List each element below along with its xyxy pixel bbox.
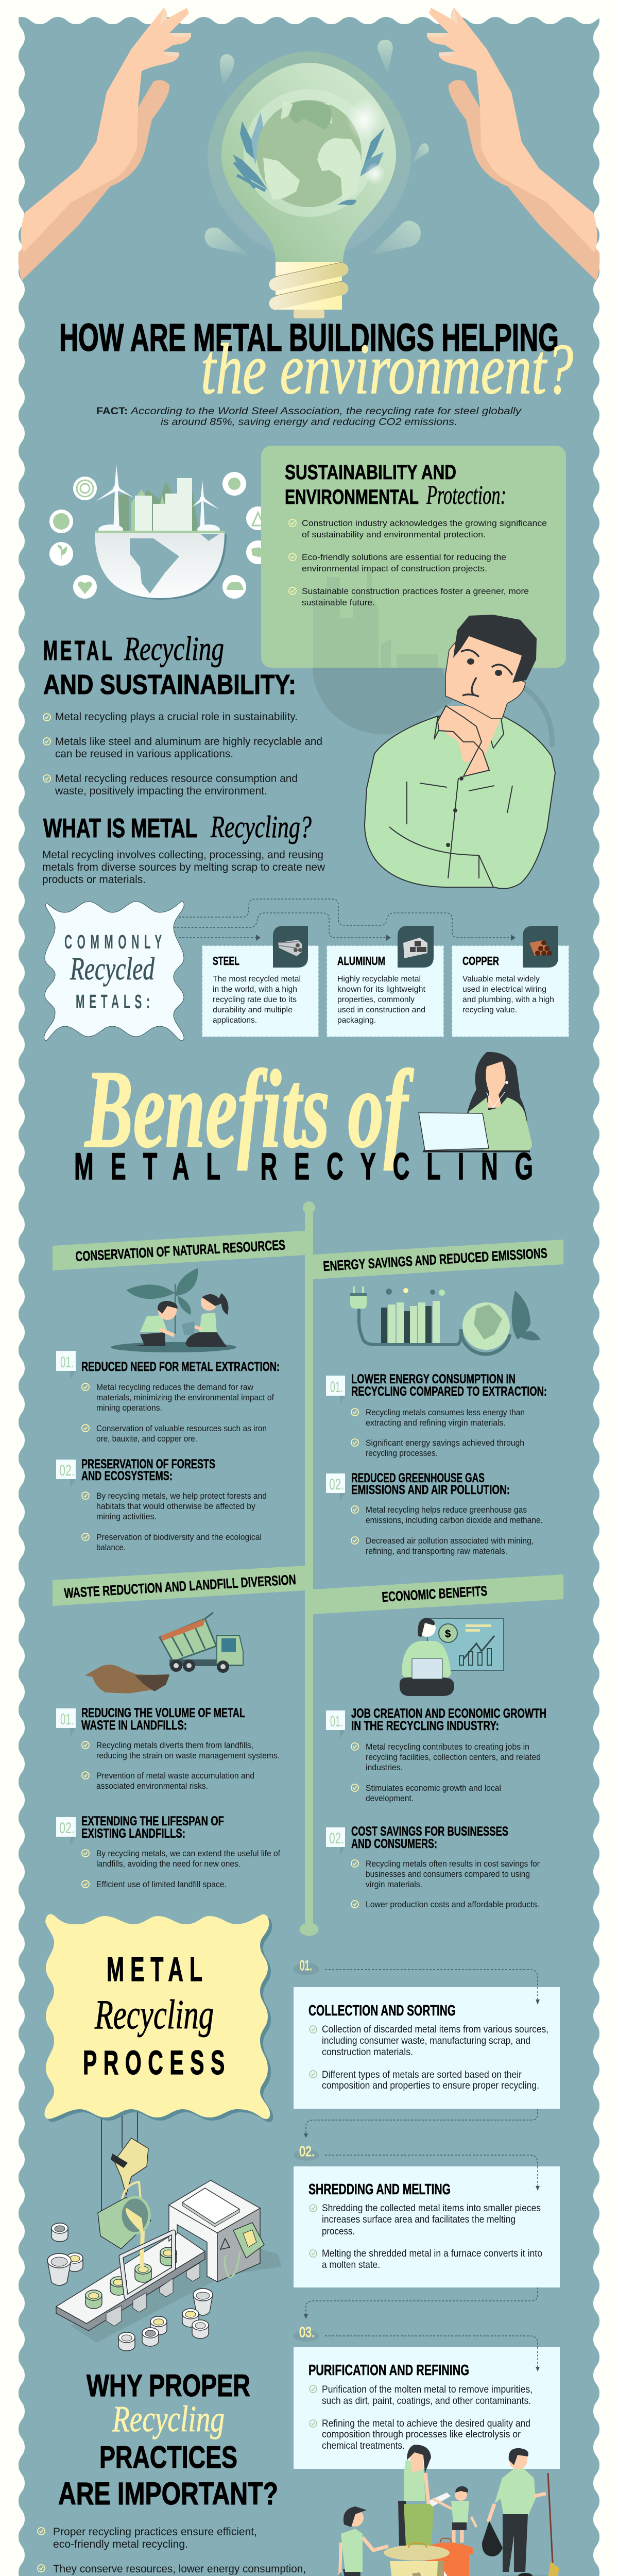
heading: preservation of forests: PRESERVATION OF FORESTS	[81, 1457, 215, 1471]
heading: job creation: JOB CREATION AND ECONOMIC GROWTH	[351, 1706, 546, 1721]
heading: metal recycling: METAL RECYCLING	[74, 1145, 533, 1188]
card: steel	[203, 926, 317, 1036]
fact text: According to the World Steel Association, the recycling rate for steel globally	[130, 406, 522, 417]
step 01 number and connector	[294, 1957, 540, 2005]
card: shredding and melting: process.	[322, 2226, 355, 2237]
card: copper: used in electrical wiring	[462, 985, 546, 994]
arrow: card 1 to step 02	[304, 2109, 538, 2138]
card: aluminum: ALUMINUM	[337, 954, 385, 968]
heading: extending the lifespan	[81, 1814, 224, 1841]
bullet list: why recycling is important	[38, 2526, 308, 2576]
heading: why proper recycling practices are important: WHY PROPER	[87, 2368, 250, 2403]
panel: metal recycling process blob: METAL	[107, 1950, 202, 1988]
tag 01: 01.	[330, 1713, 343, 1730]
card: aluminum: used in construction and	[337, 1006, 425, 1014]
panel: commonly recycled metals: METALS:	[76, 991, 150, 1013]
bullet list: sustainability: Sustainable construction practices foster a greener, more	[302, 586, 529, 596]
bullet list: reducing volume: associated environmental risks.	[96, 1781, 208, 1791]
card: purification and refining: composition through processes like electrolysis or	[322, 2429, 521, 2440]
card: aluminum: known for its lightweight	[337, 985, 426, 994]
card: shredding and melting	[294, 2166, 560, 2287]
card: copper: and plumbing, with a high	[462, 995, 554, 1004]
bullet list: why recycling is important: Proper recycling practices ensure efficient,	[53, 2526, 257, 2538]
bullet list: cost savings	[351, 1859, 540, 1909]
bullet list: extending lifespan: landfills, avoiding the need for new ones.	[96, 1859, 241, 1869]
bullet list: cost savings: businesses and consumers compared to using	[366, 1869, 530, 1879]
ribbon: waste reduction and landfill diversion	[53, 1566, 305, 1606]
paragraph: what is metal recycling: products or materials.	[42, 874, 146, 886]
fact text: FACT:	[96, 406, 128, 417]
bullet list: reduced need: materials, minimizing the environmental impact of	[96, 1393, 274, 1402]
tag 02: 02.	[59, 1820, 75, 1837]
card: shredding and melting: increases surface area and facilitates the melting	[322, 2214, 516, 2225]
heading: why proper recycling practices are important: PRACTICES	[99, 2440, 237, 2475]
icon: right hand	[427, 8, 599, 281]
tag 01	[326, 1376, 345, 1404]
bullet list: why recycling is important: They conserve resources, lower energy consumption,	[53, 2563, 306, 2575]
heading: sustainability and: SUSTAINABILITY AND	[285, 461, 456, 484]
bullet list: greenhouse gas: Metal recycling helps reduce greenhouse gas	[366, 1505, 527, 1515]
bullet list: preservation: Preservation of biodiversity and the ecological	[96, 1532, 262, 1542]
bullet list: job creation: Metal recycling contributes to creating jobs in	[366, 1742, 529, 1752]
heading: extending the lifespan: EXISTING LANDFILLS:	[81, 1826, 185, 1841]
tag 01	[56, 1351, 76, 1380]
ribbon: conservation of natural resources: CONSERVATION OF NATURAL RESOURCES	[75, 1237, 286, 1264]
card: purification and refining: PURIFICATION AND REFINING	[308, 2362, 469, 2379]
ribbon: conservation of natural resources	[53, 1230, 313, 1270]
tag 02	[56, 1460, 76, 1488]
card: collection and sorting	[294, 1987, 560, 2109]
paragraph: what is metal recycling: metals from diverse sources by melting scrap to create new	[42, 861, 325, 873]
tag 02	[56, 1817, 76, 1845]
bullet list: metal recycling: Metal recycling reduces resource consumption and	[55, 773, 298, 785]
heading: what is metal recycling	[43, 810, 312, 844]
card: copper	[453, 926, 568, 1036]
card: collection and sorting: Different types of metals are sorted based on their	[322, 2070, 522, 2080]
bullet list: extending lifespan: By recycling metals, we can extend the useful life of	[96, 1849, 280, 1858]
heading: why proper recycling practices are important: ARE IMPORTANT?	[58, 2476, 278, 2511]
bullet list: lower energy: Recycling metals consumes less energy than	[366, 1408, 525, 1417]
card: aluminum	[328, 926, 442, 1036]
icon: woman with laptop	[419, 1052, 532, 1152]
bullet list: extending lifespan	[82, 1849, 280, 1889]
panel: commonly recycled metals: Recycled	[70, 952, 155, 987]
bullet list: cost savings: virgin materials.	[366, 1879, 422, 1889]
tag 01	[326, 1710, 345, 1739]
heading: why proper recycling practices are important: Recycling	[112, 2398, 225, 2439]
heading: lower energy consumption: RECYCLING COMPARED TO EXTRACTION:	[351, 1384, 547, 1399]
tag 01: 01.	[60, 1354, 74, 1371]
card: collection and sorting: Collection of discarded metal items from various sources,	[322, 2024, 548, 2035]
bullet list: metal recycling: Metals like steel and aluminum are highly recyclable and	[55, 736, 322, 748]
bullet list: sustainability	[289, 518, 547, 607]
paragraph: what is metal recycling	[42, 849, 325, 886]
heading: reducing the volume	[81, 1706, 245, 1733]
card: aluminum: properties, commonly	[337, 995, 415, 1004]
bullet list: preservation: By recycling metals, we help protect forests and	[96, 1491, 267, 1501]
heading: metal recycling: Recycling	[124, 630, 224, 668]
panel: metal recycling process blob: PROCESS	[83, 2043, 225, 2081]
bullet list: cost savings: Recycling metals often results in cost savings for	[366, 1859, 540, 1869]
card: purification and refining	[294, 2347, 560, 2469]
bullet list: job creation: Stimulates economic growth and local	[366, 1783, 501, 1793]
bullet list: job creation	[351, 1742, 541, 1803]
paragraph: what is metal recycling: Metal recycling involves collecting, processing, and reusing	[42, 849, 323, 861]
card: shredding and melting: a molten state.	[322, 2260, 380, 2270]
heading: reducing the volume: REDUCING THE VOLUME OF METAL	[81, 1706, 245, 1720]
heading: lower energy consumption: LOWER ENERGY CONSUMPTION IN	[351, 1372, 516, 1386]
card: steel: in the world, with a high	[213, 985, 297, 994]
bullet list: cost savings: Lower production costs and affordable products.	[366, 1900, 539, 1909]
heading: metal recycling: METAL	[43, 635, 112, 666]
icon: person with laptop and chart	[400, 1618, 504, 1696]
card: aluminum: Highly recyclable metal	[337, 975, 421, 984]
step 02 number and connector: 02.	[299, 2143, 315, 2159]
heading: what is metal recycling: Recycling?	[210, 810, 312, 844]
tag 02: 02.	[59, 1462, 75, 1479]
bullet list: sustainability: Eco-friendly solutions are essential for reducing the	[302, 552, 506, 562]
heading: environmental: ENVIRONMENTAL	[285, 486, 419, 509]
tag 02: 02.	[329, 1830, 344, 1847]
heading: preservation of forests: AND ECOSYSTEMS:	[81, 1469, 173, 1483]
arrow: card 2 to step 03	[304, 2287, 538, 2319]
step 03 number and connector: 03.	[299, 2324, 315, 2340]
heading: job creation	[351, 1706, 546, 1733]
card: shredding and melting: SHREDDING AND MELTING	[308, 2181, 451, 2198]
bullet list: sustainability: Construction industry acknowledges the growing significance	[302, 518, 547, 528]
tag 01: 01.	[60, 1711, 74, 1728]
tag 01	[56, 1708, 76, 1737]
bullet list: preservation: mining activities.	[96, 1512, 157, 1521]
icon: green energy city	[350, 1286, 541, 1354]
card: purification and refining: chemical treatments.	[322, 2441, 405, 2451]
card: steel: recycling rate due to its	[213, 995, 297, 1004]
heading: metal recycling	[43, 630, 224, 668]
bullet list: reduced need: mining operations.	[96, 1403, 162, 1413]
card: collection and sorting: composition and properties to ensure proper recycling.	[322, 2080, 539, 2091]
tag 02	[326, 1473, 345, 1502]
heading: preservation of forests	[81, 1457, 215, 1483]
bullet list: lower energy	[351, 1408, 525, 1458]
icon: half globe with green city and eco badges	[49, 465, 270, 600]
card: purification and refining: Purification of the molten metal to remove impurities,	[322, 2384, 533, 2395]
bullet list: sustainability: of sustainability and environmental protection.	[302, 530, 486, 539]
bullet list: greenhouse gas: emissions, including carbon dioxide and methane.	[366, 1515, 543, 1525]
icon: family recycling	[329, 2445, 570, 2576]
card: collection and sorting: construction materials.	[322, 2047, 413, 2058]
icon: aluminum tubes	[403, 938, 427, 958]
card: shredding and melting: Melting the shredded metal in a furnace converts it into	[322, 2248, 542, 2259]
bullet list: reduced need: Conservation of valuable resources such as iron	[96, 1423, 267, 1433]
bullet list: job creation: development.	[366, 1793, 414, 1803]
bullet list: reducing volume: reducing the strain on waste management systems.	[96, 1751, 280, 1760]
icon: copper pipes	[529, 940, 552, 956]
ribbon: energy savings and reduced emissions	[313, 1240, 563, 1279]
heading: what is metal recycling: WHAT IS METAL	[43, 814, 197, 843]
heading: extending the lifespan: EXTENDING THE LIFESPAN OF	[81, 1814, 224, 1828]
heading: cost savings: AND CONSUMERS:	[351, 1837, 437, 1851]
bullet list: reducing volume: Recycling metals diverts them from landfills,	[96, 1740, 253, 1750]
bullet list: lower energy: Significant energy savings achieved through	[366, 1438, 524, 1448]
fact text: is around 85%, saving energy and reducing CO2 emissions.	[161, 417, 457, 428]
heading: why proper recycling practices are important	[58, 2368, 278, 2511]
card: collection and sorting: COLLECTION AND SORTING	[308, 2003, 456, 2019]
card: purification and refining: Refining the metal to achieve the desired quality and	[322, 2418, 530, 2429]
bullet list: metal recycling	[43, 711, 322, 797]
card: aluminum: packaging.	[337, 1016, 376, 1025]
card: steel: durability and multiple	[213, 1006, 293, 1014]
icon: steel pipes	[278, 940, 302, 956]
bullet list: sustainability: environmental impact of construction projects.	[302, 564, 487, 573]
arrows: dashed connectors to metal cards	[174, 899, 513, 938]
icon: light drops around bulb	[205, 40, 429, 255]
bullet list: reduced need	[82, 1382, 274, 1444]
bullet list: job creation: industries.	[366, 1762, 403, 1772]
card: steel: The most recycled metal	[213, 975, 301, 984]
fact text	[96, 406, 522, 428]
step 03 number and connector	[294, 2324, 538, 2347]
icon: planting people	[111, 1268, 236, 1352]
icon: left hand	[19, 8, 191, 281]
bullet list: reduced need: ore, bauxite, and copper ore.	[96, 1434, 197, 1444]
card: shredding and melting: Shredding the collected metal items into smaller pieces	[322, 2203, 541, 2214]
bullet list: metal recycling: can be reused in various applications.	[55, 748, 233, 760]
bullet list: sustainability: sustainable future.	[302, 598, 375, 607]
bullet list: job creation: recycling facilities, collection centers, and related	[366, 1752, 541, 1762]
heading: lower energy consumption	[351, 1372, 547, 1399]
tag 02	[326, 1827, 345, 1856]
bullet list: metal recycling: waste, positively impacting the environment.	[55, 785, 267, 797]
heading: reduced greenhouse gas	[351, 1471, 510, 1497]
heading: reducing the volume: WASTE IN LANDFILLS:	[81, 1718, 187, 1733]
bullet list: preservation: balance.	[96, 1543, 126, 1552]
heading: cost savings	[351, 1824, 508, 1851]
card: copper: COPPER	[462, 954, 499, 968]
bullet list: reducing volume: Prevention of metal waste accumulation and	[96, 1771, 254, 1781]
panel: metal recycling process blob	[44, 1914, 273, 2122]
heading: reduced need for metal extraction: REDUCED NEED FOR METAL EXTRACTION:	[81, 1360, 280, 1374]
bullet list: why recycling is important: eco-friendly metal recycling.	[53, 2538, 188, 2550]
card: purification and refining: such as dirt, paint, coatings, and other contaminants.	[322, 2396, 531, 2406]
heading: reduced greenhouse gas: REDUCED GREENHOUSE GAS	[351, 1471, 485, 1485]
heading: protection script: Protection:	[426, 481, 506, 510]
bullet list: greenhouse gas	[351, 1505, 543, 1556]
card: steel: applications.	[213, 1016, 257, 1025]
step 01 number and connector: 01.	[300, 1957, 312, 1973]
card: steel: STEEL	[213, 954, 239, 968]
icon: thinking man	[313, 615, 555, 889]
icon: person with laptop and chart: $	[445, 1629, 451, 1640]
bullet list: lower energy: extracting and refining virgin materials.	[366, 1418, 506, 1428]
icon: light bulb with globe	[208, 52, 411, 318]
heading: cost savings: COST SAVINGS FOR BUSINESSES	[351, 1824, 508, 1839]
card: copper: recycling value.	[462, 1006, 517, 1014]
card: collection and sorting: including consumer waste, manufacturing scrap, and	[322, 2036, 530, 2046]
bullet list: reduced need: Metal recycling reduces the demand for raw	[96, 1382, 254, 1392]
bullet list: reducing volume	[82, 1740, 280, 1791]
bullet list: greenhouse gas: Decreased air pollution associated with mining,	[366, 1536, 534, 1546]
arrowheads	[256, 935, 516, 941]
card: copper: Valuable metal widely	[462, 975, 540, 984]
tag 02: 02.	[329, 1476, 344, 1493]
panel: commonly recycled metals: COMMONLY	[64, 931, 162, 953]
bullet list: preservation: habitats that would otherwise be affected by	[96, 1501, 255, 1511]
bullet list: metal recycling: Metal recycling plays a crucial role in sustainability.	[55, 711, 298, 723]
bullet list: greenhouse gas: refining, and transporting raw materials.	[366, 1546, 507, 1556]
ribbon: waste reduction and landfill diversion: WASTE REDUCTION AND LANDFILL DIVERSION	[64, 1572, 297, 1601]
panel: commonly recycled metals	[44, 901, 184, 1041]
heading: benefits of: Benefits of	[84, 1047, 414, 1171]
bullet list: preservation	[82, 1491, 267, 1552]
icon: casting conveyor machine	[47, 2110, 282, 2351]
bullet list: extending lifespan: Efficient use of limited landfill space.	[96, 1879, 227, 1889]
step 02 number and connector	[294, 2143, 538, 2166]
ribbon: economic benefits	[313, 1574, 563, 1614]
panel: sustainability and environmental protection	[261, 446, 566, 668]
panel: metal recycling process blob: Recycling	[94, 1992, 214, 2038]
bullet list: lower energy: recycling processes.	[366, 1448, 438, 1458]
ribbon: economic benefits: ECONOMIC BENEFITS	[382, 1583, 488, 1605]
heading: job creation: IN THE RECYCLING INDUSTRY:	[351, 1719, 499, 1733]
heading: and sustainability: AND SUSTAINABILITY:	[43, 669, 296, 700]
timeline stem	[300, 1201, 318, 1936]
heading: reduced greenhouse gas: EMISSIONS AND AIR POLLUTION:	[351, 1483, 510, 1497]
icon: dump truck and landfill	[85, 1613, 243, 1693]
tag 01: 01.	[330, 1379, 343, 1396]
